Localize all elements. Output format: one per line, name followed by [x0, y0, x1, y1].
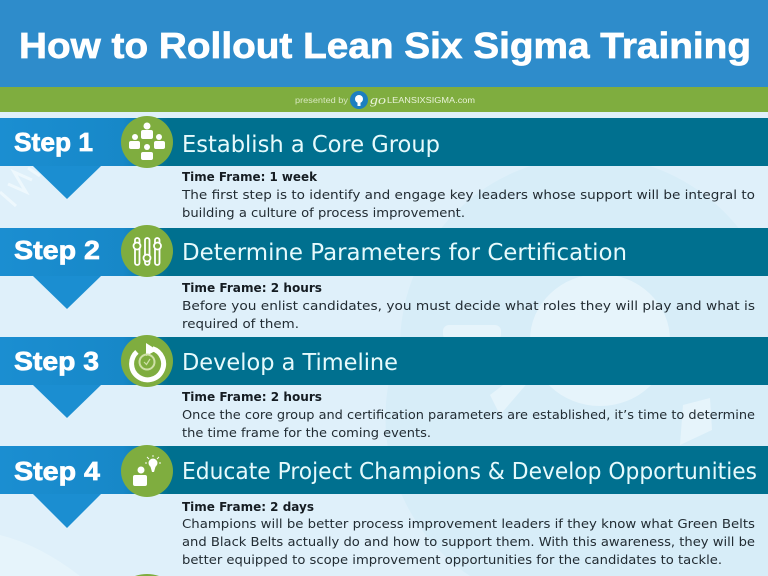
- body text: the time frame for the coming events.: [182, 425, 431, 440]
- icon: sliders: [121, 225, 173, 277]
- band: [0, 337, 768, 385]
- body text: required of them.: [182, 316, 299, 331]
- logo wordmark remainder: LEANSIXSIGMA.com: [387, 96, 475, 105]
- body text: [182, 499, 755, 567]
- body text: [182, 280, 755, 331]
- body text: building a culture of process improvement.: [182, 205, 465, 220]
- title: How to Rollout Lean Six Sigma Training: [19, 25, 751, 66]
- green presenter strip: [0, 87, 768, 112]
- band: [0, 228, 768, 276]
- step 1: [0, 116, 768, 220]
- body text: Champions will be better process improvement leaders if they know what Green Belts: [182, 516, 755, 531]
- icon: people: [121, 116, 173, 168]
- icon: idea person: [121, 445, 173, 497]
- step 2: [0, 225, 768, 331]
- step label: Step 1: [14, 127, 93, 157]
- arrow: [33, 494, 101, 528]
- presented by text: presented by: [295, 96, 348, 105]
- body text: better equipped to scope improvement opportunities for the candidates to tackle.: [182, 552, 722, 567]
- arrow: [33, 166, 101, 199]
- header banner: [0, 0, 768, 87]
- band: [0, 446, 768, 494]
- body text: [181, 169, 755, 220]
- body text: Time Frame: 2 hours: [182, 389, 322, 404]
- step 4: [0, 445, 768, 567]
- next step icon peek: [135, 574, 159, 576]
- step label: Step 4: [14, 456, 101, 486]
- body text: Time Frame: 1 week: [182, 169, 318, 184]
- body text: and Black Belts actually do and how to support them. With this awareness, they will be: [182, 534, 755, 549]
- heading: Determine Parameters for Certification: [182, 238, 627, 266]
- band: [0, 118, 768, 166]
- body text: The first step is to identify and engage key leaders whose support will be integral to: [181, 187, 755, 202]
- arrow: [33, 385, 101, 418]
- logo wordmark: go: [370, 92, 387, 107]
- body text: Time Frame: 2 hours: [182, 280, 322, 295]
- body text: Before you enlist candidates, you must decide what roles they will play and what is: [182, 298, 755, 313]
- body text: Once the core group and certification parameters are established, it’s time to determine: [182, 407, 755, 422]
- arrow: [33, 276, 101, 309]
- heading: Develop a Timeline: [182, 348, 398, 376]
- step 3: [0, 335, 768, 440]
- icon: logo bulb: [350, 91, 368, 109]
- body text: Time Frame: 2 days: [182, 499, 314, 514]
- body text: [182, 389, 755, 440]
- step label: Step 3: [14, 346, 99, 376]
- icon: timeline clock: [121, 335, 173, 387]
- watermark: lightbulb logo: [0, 167, 40, 207]
- heading: Establish a Core Group: [182, 130, 440, 158]
- step label: Step 2: [14, 235, 100, 265]
